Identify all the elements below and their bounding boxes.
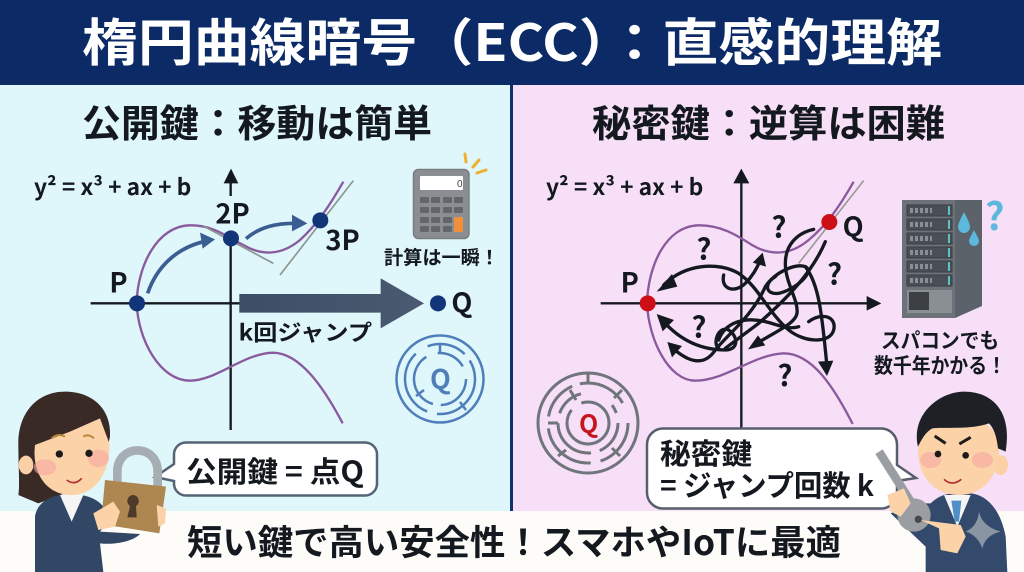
tangent lines [203, 181, 353, 275]
character: man with key [879, 392, 1008, 572]
jump arrows [148, 223, 295, 293]
tangled paths [664, 229, 834, 367]
panel: secret key background [511, 84, 1024, 512]
point labels: P [621, 261, 639, 301]
blush [34, 459, 56, 475]
sweat drops [958, 212, 979, 246]
title banner: 楕円曲線暗号（ECC）：直感的理解 [82, 2, 942, 76]
caption: supercomputer: 数千年かかる！ [874, 350, 1006, 380]
question marks: ? [827, 251, 842, 293]
face [35, 418, 109, 495]
chart: public key elliptic curve [34, 169, 472, 430]
shirt [60, 495, 83, 522]
question marks [691, 204, 842, 395]
face details [935, 451, 941, 457]
formula: y² = x³ + ax + b [34, 169, 191, 202]
axes [91, 182, 243, 430]
icon: calculator [414, 154, 486, 238]
points [129, 212, 446, 311]
suit [891, 493, 1007, 572]
bottom banner [0, 511, 1024, 572]
hair [18, 392, 110, 503]
shirt and tie [944, 495, 971, 527]
axes [601, 180, 869, 428]
face [918, 420, 999, 495]
heading: secret key: 秘密鍵：逆算は困難 [592, 93, 945, 148]
ear [993, 455, 1008, 475]
elliptic curve [137, 182, 343, 423]
callout: public key [155, 442, 377, 496]
big arrow [239, 278, 424, 328]
chart: secret key elliptic curve [546, 169, 881, 428]
formula: y² = x³ + ax + b [546, 169, 703, 202]
callout: secret key [647, 428, 916, 508]
y axis arrowhead [224, 169, 238, 183]
question marks: ? [696, 226, 711, 268]
maze letter: Q [430, 358, 451, 397]
point labels: 2P [215, 191, 250, 231]
points [640, 214, 837, 311]
icon: server rack [902, 186, 1005, 318]
axis arrowheads [733, 169, 881, 311]
icon: calculator: 0 [457, 179, 463, 190]
callout: public key: 公開鍵 = 点Q [186, 449, 364, 491]
question marks: ? [777, 353, 792, 395]
heading: public key: 公開鍵：移動は簡単 [82, 93, 432, 148]
point labels: 3P [325, 218, 360, 258]
sparkle [966, 512, 1001, 548]
point labels [109, 191, 472, 320]
title banner [0, 0, 1024, 85]
jump label: k回ジャンプ [239, 316, 372, 348]
tangent line [799, 181, 864, 263]
ear [19, 456, 33, 474]
arrowheads [657, 253, 833, 376]
maze letter: Q [579, 405, 598, 441]
bottom banner: 短い鍵で高い安全性！スマホやIoTに最適 [187, 515, 841, 566]
caption: supercomputer: スパコンでも [881, 325, 999, 355]
hair [917, 392, 1007, 452]
blush [920, 452, 941, 468]
elliptic curve [647, 182, 854, 424]
point labels: Q [843, 205, 864, 245]
point labels: Q [451, 280, 472, 320]
character: woman with padlock [18, 392, 166, 572]
question marks: ? [771, 204, 786, 246]
hands [93, 502, 120, 530]
panel: public key background [0, 84, 511, 512]
key [879, 452, 911, 502]
icon: grey maze [538, 373, 638, 473]
panel divider [510, 84, 513, 512]
callout: secret key: = ジャンプ回数 k [660, 463, 874, 505]
padlock shackle [117, 450, 158, 487]
hands [887, 488, 911, 517]
caption: supercomputer [874, 325, 1006, 380]
blue question mark: ? [985, 186, 1005, 241]
question marks: ? [691, 305, 706, 347]
point labels [621, 205, 864, 301]
padlock body [101, 480, 166, 533]
keyhole [127, 495, 139, 517]
caption: instant calculation: 計算は一瞬！ [384, 243, 499, 270]
eyes and mouth [56, 450, 63, 458]
suit [35, 495, 140, 572]
callout: secret key: 秘密鍵 [660, 431, 752, 473]
point labels: P [109, 261, 128, 301]
icon: blue maze [396, 336, 484, 422]
